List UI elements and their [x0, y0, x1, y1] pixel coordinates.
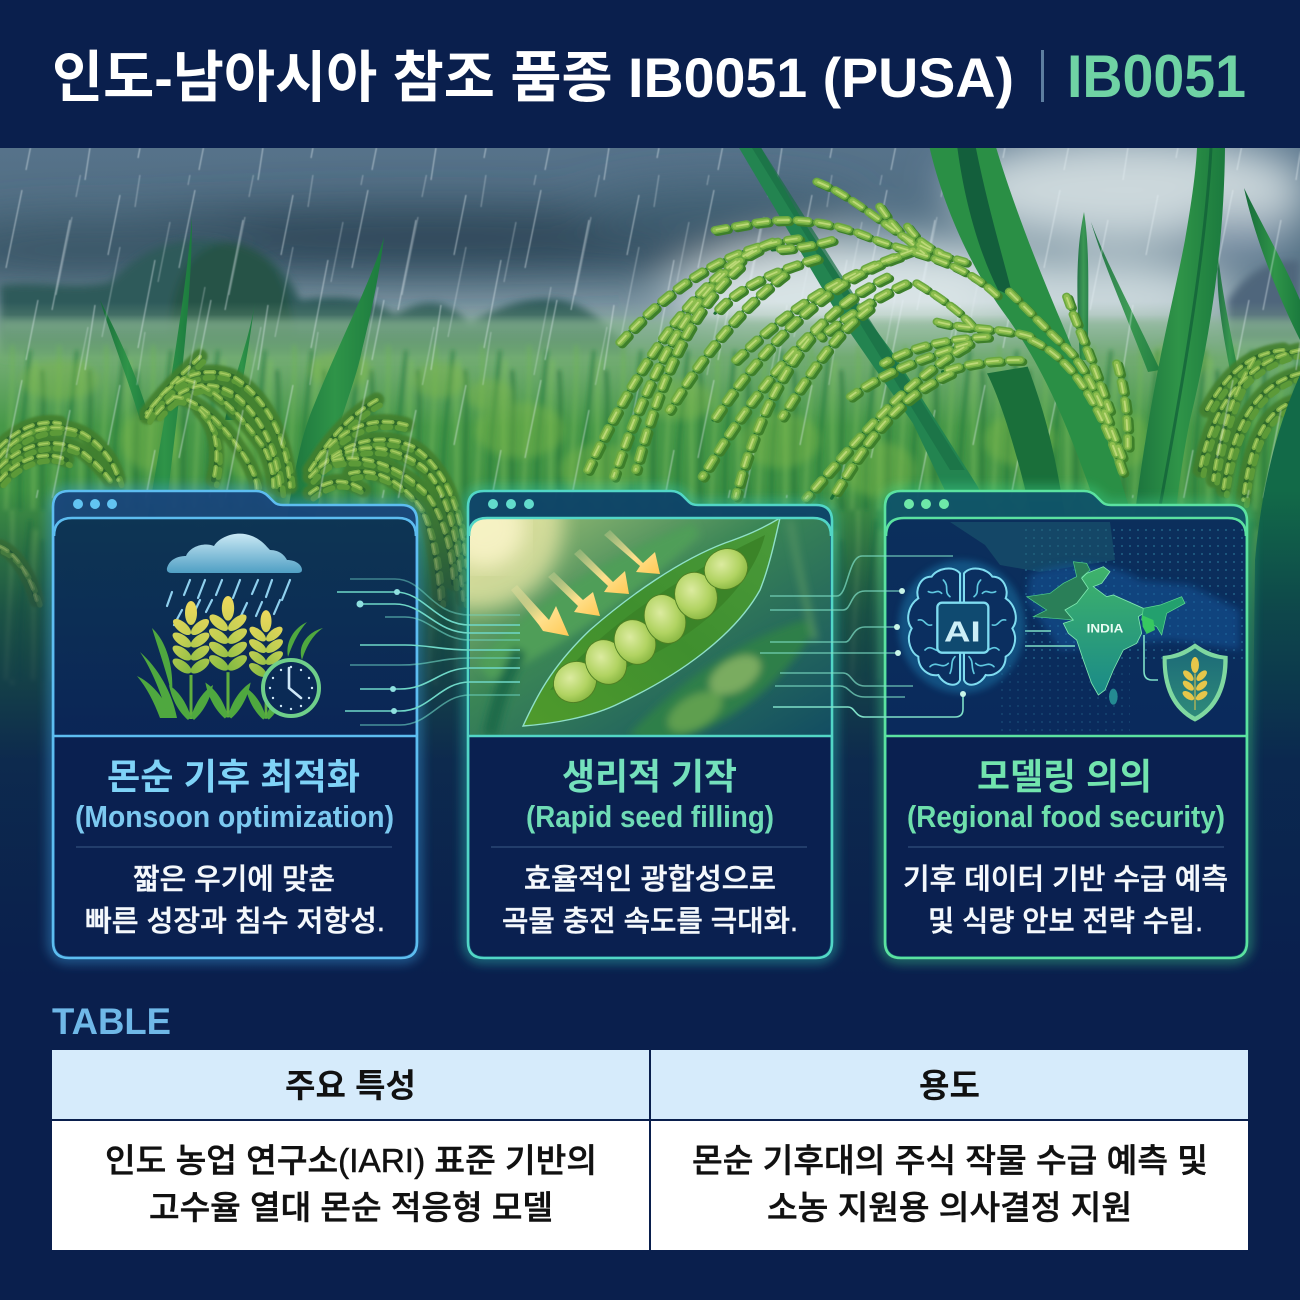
- icon: clock: [263, 660, 319, 716]
- table row: 인도 농업 연구소(IARI) 표준 기반의: [105, 1142, 597, 1179]
- subheading: (Regional food security): [907, 799, 1225, 834]
- heading: 몬순 기후 최적화: [107, 756, 360, 797]
- icon: rain cloud, rice and clock: [137, 534, 323, 720]
- map: India: INDIA: [1087, 622, 1123, 636]
- sun arrows: [511, 530, 660, 636]
- main rice panicles: [587, 182, 1130, 500]
- distant hills: [0, 240, 1300, 352]
- heading: 모델링 의의: [977, 756, 1152, 797]
- rain streaks: [0, 148, 1300, 498]
- body text: [502, 863, 798, 938]
- table header: 용도: [919, 1067, 980, 1104]
- window dots: [488, 499, 534, 509]
- icon: AI brain: AI: [944, 616, 981, 648]
- body text: 및 식량 안보 전략 수립.: [928, 905, 1203, 938]
- map: India: [1027, 562, 1185, 705]
- foreground leaves: [739, 148, 1128, 504]
- icon: AI brain: [898, 560, 1025, 693]
- table: [52, 1050, 1248, 1250]
- table header: [285, 1067, 980, 1104]
- panel: regional food security: [885, 491, 1247, 958]
- panel: rapid seed filling: [456, 480, 844, 970]
- body text: 짧은 우기에 맞춘: [133, 863, 335, 896]
- map and AI illustration: [887, 519, 1245, 735]
- background panicles: [0, 350, 1300, 605]
- main pod: [523, 518, 780, 726]
- storm clouds: [0, 148, 1300, 344]
- field: [0, 306, 1300, 784]
- subheading: (Rapid seed filling): [526, 799, 774, 834]
- body text: 효율적인 광합성으로: [524, 863, 776, 896]
- background blades: [100, 188, 1300, 504]
- title: IB0051: [1067, 43, 1246, 110]
- body text: 곡물 충전 속도를 극대화.: [502, 905, 798, 938]
- body text: [903, 863, 1228, 938]
- connector lines between panels: [337, 556, 966, 725]
- table row: 소농 지원용 의사결정 지원: [767, 1189, 1132, 1226]
- table row: 몬순 기후대의 주식 작물 수급 예측 및: [692, 1142, 1208, 1179]
- body text: 빠른 성장과 침수 저항성.: [85, 905, 385, 938]
- subheading: (Monsoon optimization): [75, 799, 394, 834]
- fade to navy: [0, 490, 1300, 980]
- illustration: rice grain pod with sun arrows: [470, 519, 830, 735]
- table row: [105, 1142, 1208, 1226]
- header bar: [0, 0, 1300, 148]
- heading: 생리적 기작: [562, 756, 737, 797]
- far blurred rice clumps: [20, 342, 1210, 498]
- panel: monsoon optimization: [53, 491, 417, 958]
- body text: 기후 데이터 기반 수급 예측: [903, 863, 1228, 896]
- icon: shield with rice: [1163, 643, 1228, 722]
- window dots: [73, 499, 117, 509]
- body text: [85, 863, 385, 938]
- hero photo: monsoon rice field: [0, 148, 1300, 816]
- table header: 주요 특성: [285, 1067, 416, 1104]
- window dots: [904, 499, 949, 509]
- table label: TABLE: [52, 1001, 171, 1042]
- table row: 고수율 열대 몬순 적응형 모델: [149, 1189, 553, 1226]
- title: 인도-남아시아 참조 품종 IB0051 (PUSA): [52, 46, 1014, 109]
